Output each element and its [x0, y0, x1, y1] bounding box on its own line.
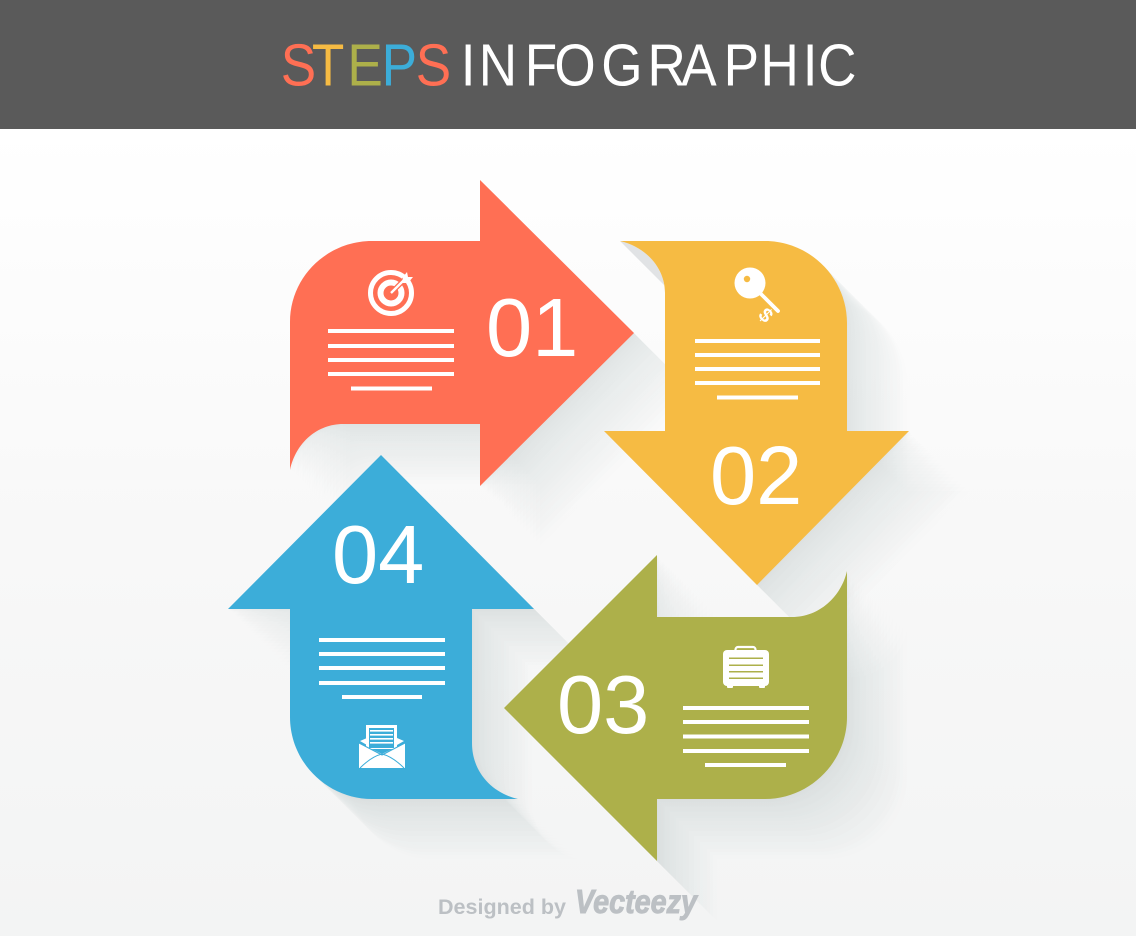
title: I [803, 32, 818, 98]
header band [0, 0, 1136, 129]
title: P [724, 32, 759, 98]
title: T [312, 32, 344, 98]
shadow wedge: arrow 2 inner curve [620, 241, 665, 293]
title: R [648, 32, 686, 98]
credit line: Vecteezy [575, 883, 698, 920]
title: O [554, 32, 596, 98]
shadow: arrow 2 [605, 242, 969, 645]
number 03: 03 [557, 658, 649, 751]
shadow: arrow 3 [505, 556, 907, 921]
title: G [601, 32, 643, 98]
icon: briefcase [723, 647, 769, 688]
title: P [382, 32, 417, 98]
icon: open envelope [359, 725, 405, 768]
title: S [416, 32, 451, 98]
title: C [818, 32, 856, 98]
number 02: 02 [710, 429, 802, 522]
shadow: arrow 1 [291, 181, 694, 546]
panel: step 03 olive arrow [504, 555, 847, 861]
text lines [695, 339, 820, 400]
icon: target with dart [370, 272, 413, 314]
shadow: arrow 4 [229, 456, 594, 859]
text lines [319, 638, 445, 699]
panel: step 04 blue arrow [228, 455, 534, 799]
title: A [681, 32, 717, 98]
title: H [761, 32, 799, 98]
panel: step 02 yellow arrow [604, 241, 909, 585]
text lines [683, 706, 809, 767]
text lines [328, 329, 454, 390]
panel: step 01 red arrow [290, 180, 634, 486]
icon: key with dollar sign [734, 268, 778, 327]
credit line [438, 883, 698, 920]
title: E [347, 32, 383, 98]
title: N [479, 32, 517, 98]
credit line: Designed by [438, 895, 566, 919]
number 01: 01 [486, 281, 578, 374]
icon: key with dollar sign: $ [754, 304, 777, 327]
title: S [281, 32, 316, 98]
long shadows [229, 181, 969, 921]
number 04: 04 [332, 508, 424, 601]
title: F [525, 32, 557, 98]
title: I [461, 32, 476, 98]
